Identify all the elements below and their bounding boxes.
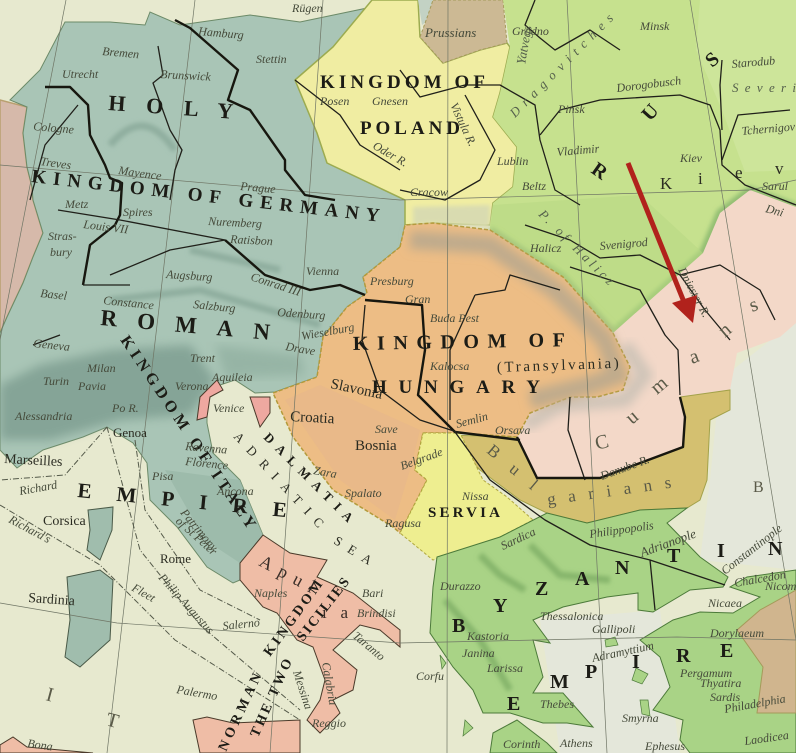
region: Sardinia	[65, 570, 113, 667]
labels: Byzantine Empire: Constantinople	[718, 521, 785, 577]
labels: Holy Roman Empire: Vienna	[306, 264, 339, 278]
region: Russia	[490, 0, 796, 333]
labels: Adriatic: SEA	[331, 533, 375, 568]
labels: Holy Roman Empire: Treves	[40, 154, 72, 172]
region: Poland southern band	[413, 205, 490, 228]
labels: Byzantine Empire: Corinth	[503, 737, 540, 751]
labels: Holy Roman Empire: Hamburg	[197, 24, 244, 42]
labels: Holy Roman Empire: Cologne	[33, 119, 75, 137]
labels: Russia: Minsk	[639, 19, 670, 33]
labels: Holy Roman Empire: EMPIRE	[77, 478, 288, 522]
labels: Holy Roman Empire: Corsica	[43, 514, 87, 529]
labels: Byzantine Empire: Adramyttium	[590, 638, 655, 665]
labels: Holy Roman Empire: Florence	[184, 454, 229, 473]
labels: Russia: Kiev	[679, 151, 703, 165]
labels: Holy Roman Empire: Fleet	[129, 580, 158, 605]
labels: Russia: Sarul	[762, 179, 789, 193]
region: Corsica	[87, 507, 113, 560]
region: North Africa	[0, 737, 93, 753]
region: Kingdom of the Two Sicilies mainland	[240, 535, 400, 733]
labels: Two Sicilies: Calabria	[319, 661, 340, 706]
labels: Holy Roman Empire: HOLY	[108, 90, 234, 124]
labels: Russia: Grodno	[512, 24, 549, 38]
labels: Holy Roman Empire: T	[104, 709, 121, 733]
labels: Holy Roman Empire: Wieselburg	[300, 320, 355, 343]
labels: Poland: Lublin	[496, 154, 528, 168]
labels: Holy Roman Empire: KINGDOM OF ITALY	[117, 333, 259, 532]
labels: Hungary: Belgrade	[398, 444, 445, 473]
labels: Russia: Pinsk	[557, 102, 585, 116]
labels: Two Sicilies: SICILIES	[294, 575, 353, 644]
labels: Hungary: HUNGARY	[372, 377, 540, 398]
labels: Holy Roman Empire: Geneva	[33, 336, 71, 354]
labels: Russia: U	[637, 100, 663, 125]
labels: Holy Roman Empire: Genoa	[113, 425, 147, 440]
labels: Holy Roman Empire: bury	[50, 245, 73, 259]
labels: Holy Roman Empire: Stettin	[256, 52, 287, 66]
region: Byzantine Europe	[430, 508, 728, 727]
labels: Adriatic	[231, 429, 375, 568]
labels: Holy Roman Empire: Drave	[283, 339, 317, 358]
labels: Byzantine Empire: Durazzo	[439, 579, 481, 593]
labels: Two Sicilies: Brindisi	[357, 606, 396, 620]
labels: Byzantine Empire: Janina	[462, 646, 495, 660]
labels: Holy Roman Empire: Conrad III	[249, 270, 303, 299]
labels: Holy Roman Empire	[4, 24, 381, 733]
labels: Cumans: C	[593, 430, 611, 455]
labels: Holy Roman Empire: Nuremberg	[207, 214, 262, 231]
region: Holy Roman Empire	[0, 7, 405, 583]
labels: Holy Roman Empire: Ravenna	[184, 439, 228, 457]
labels: Poland: Cracow	[410, 185, 448, 199]
labels: Hungary: Buda Pest	[430, 311, 480, 325]
labels: Serbia	[428, 489, 500, 521]
labels: Two Sicilies: KINGDOM	[261, 578, 326, 659]
region: Sicily	[193, 717, 300, 753]
labels: Holy Roman Empire: Richard's	[6, 512, 54, 546]
labels: Hungary: KINGDOM OF	[353, 329, 565, 355]
labels: Holy Roman Empire: Philip Augustus	[155, 570, 217, 637]
labels: Hungary: Ragusa	[384, 516, 421, 530]
region: Dalmatian coast	[250, 397, 270, 427]
labels: Byzantine Empire: Gallipoli	[592, 622, 635, 636]
region: Baltic water	[418, 0, 445, 25]
labels: Byzantine Empire	[416, 479, 796, 753]
region: France	[0, 100, 43, 333]
labels: Two Sicilies: THE TWO	[248, 657, 296, 740]
labels: Holy Roman Empire: ROMAN	[100, 305, 271, 345]
labels: Byzantine Empire: Kastoria	[466, 629, 509, 643]
labels: Two Sicilies	[27, 551, 396, 753]
labels: Hungary	[290, 274, 619, 530]
labels: Russia: Vladimir	[556, 141, 600, 159]
region: Serbia	[400, 433, 533, 560]
labels: Holy Roman Empire: Pavia	[77, 379, 106, 393]
labels: Holy Roman Empire: Po R.	[111, 401, 139, 415]
labels: Poland: Oder R.	[370, 138, 410, 170]
labels: Byzantine Empire: Laodicea	[742, 728, 790, 748]
labels: Byzantine Empire: Ephesus	[644, 739, 685, 753]
labels: Holy Roman Empire: Milan	[86, 361, 116, 375]
labels: Two Sicilies: NORMAN	[216, 671, 265, 753]
labels: Hungary: Save	[375, 422, 398, 436]
labels: Byzantine Empire: Philippopolis	[587, 518, 655, 541]
labels: Poland: Rügen	[291, 1, 323, 15]
region: Cumans	[517, 190, 796, 478]
labels: Holy Roman Empire: Louis VII	[82, 217, 130, 237]
labels: Cumans: n	[714, 319, 736, 342]
islands: Aegean	[440, 637, 650, 736]
region: Venice	[197, 380, 223, 420]
labels: Holy Roman Empire: Prague	[239, 179, 277, 196]
labels: Hungary: Spalato	[345, 486, 382, 500]
region: Byzantine Anatolia	[640, 570, 796, 753]
labels: Poland: KINGDOM OF	[320, 72, 485, 93]
labels: Russia: Yatvegs	[513, 24, 535, 66]
labels: Poland: Vistula R.	[447, 100, 480, 148]
labels: Poland: Posen	[319, 94, 349, 108]
labels: Bulgarians	[483, 441, 672, 509]
labels: Two Sicilies: Reggio	[311, 716, 346, 730]
labels: Serbia: SERVIA	[428, 505, 500, 521]
labels: Russia: Starodub	[731, 53, 776, 71]
labels: Cumans: a	[686, 345, 702, 369]
labels: Cumans: Danube R.	[597, 452, 651, 483]
labels: Russia: R	[587, 158, 612, 185]
labels: Byzantine Empire: BYZANTIN	[452, 538, 783, 637]
region: Byzantine Morea	[490, 720, 557, 753]
labels: Poland: Prussians	[424, 25, 476, 40]
labels: Cumans: s	[746, 293, 761, 317]
region: Seljuk lands	[737, 590, 796, 713]
labels: Hungary: Presburg	[369, 274, 414, 288]
labels: Russia: Dni	[763, 201, 785, 220]
region: Prussians	[420, 0, 507, 63]
labels: Holy Roman Empire: Marseilles	[4, 452, 63, 470]
labels: Holy Roman Empire: Spires	[123, 205, 153, 219]
labels: Byzantine Empire: Philadelphia	[722, 691, 787, 716]
labels: Russia: Tchernigov	[741, 119, 796, 138]
labels: Holy Roman Empire: Bremen	[102, 44, 140, 61]
arrow: red arrow pointing to Cuman lands	[628, 163, 697, 323]
labels: Holy Roman Empire: Mayence	[117, 163, 163, 183]
labels: Two Sicilies: Salerno	[222, 615, 260, 633]
labels: Russia: Svenigrod	[599, 235, 649, 253]
labels: Russia: v	[775, 159, 784, 178]
labels: Holy Roman Empire: Richard	[17, 477, 59, 498]
labels: Byzantine Empire: Thebes	[540, 697, 574, 711]
labels: Holy Roman Empire: of St Peter	[173, 514, 220, 558]
labels: Holy Roman Empire: Utrecht	[62, 67, 99, 81]
labels: Holy Roman Empire: Metz	[64, 197, 89, 211]
labels: Holy Roman Empire: Augsburg	[165, 267, 213, 284]
labels: Holy Roman Empire: Salzburg	[193, 297, 236, 315]
labels: Russia: Dniester R.	[675, 264, 713, 320]
labels: Holy Roman Empire: Ratisbon	[229, 232, 273, 248]
labels: Russia: Dorogobusch	[615, 73, 682, 95]
labels: Russia: K	[660, 174, 673, 193]
labels: Russia: S	[701, 48, 724, 72]
labels: Byzantine Empire: Thyatira	[700, 676, 741, 690]
labels: Holy Roman Empire: Brunswick	[160, 67, 212, 84]
labels: Poland: Gnesen	[372, 94, 408, 108]
labels: Byzantine Empire: Dorylaeum	[709, 626, 764, 640]
labels: Byzantine Empire: Nicaea	[707, 596, 742, 610]
labels: Holy Roman Empire: Aquileia	[211, 370, 253, 384]
labels: Bulgarians: garians	[546, 473, 672, 509]
labels: Byzantine Empire: Corfu	[416, 669, 444, 683]
labels: Cumans	[593, 293, 761, 483]
labels: Two Sicilies: Bari	[362, 586, 383, 600]
labels: Two Sicilies: Taranto	[350, 629, 388, 663]
labels: Byzantine Empire: Chalcedon	[733, 567, 787, 590]
labels: Byzantine Empire: Athens	[559, 736, 593, 750]
labels: Byzantine Empire: Larissa	[486, 661, 523, 675]
labels: Russia: P. of Halicz	[535, 206, 617, 288]
labels: Two Sicilies: Bona	[27, 736, 54, 753]
region: Poland	[295, 0, 517, 225]
labels: Byzantine Empire: Sardica	[498, 524, 538, 553]
labels: Two Sicilies: Messina	[290, 668, 316, 711]
labels: Cumans: u	[621, 406, 643, 429]
labels: Holy Roman Empire: Stras-	[48, 229, 77, 243]
labels: Serbia: Nissa	[461, 489, 489, 503]
labels: Hungary: Gran	[405, 292, 430, 306]
labels: Russia: Severi	[732, 80, 796, 95]
labels: Byzantine Empire: EMPIRE	[507, 640, 733, 715]
labels: Holy Roman Empire: KINGDOM OF GERMANY	[30, 166, 381, 227]
labels: Byzantine Empire: Smyrna	[622, 711, 659, 725]
labels: Two Sicilies: Palermo	[174, 682, 219, 703]
labels: Russia: i	[698, 169, 703, 188]
labels: Holy Roman Empire: Basel	[40, 286, 68, 303]
labels: Russia: e	[735, 163, 743, 182]
labels: Bulgarians: Bul	[483, 441, 542, 494]
labels: Byzantine Empire: Sardis	[710, 690, 741, 704]
labels: Holy Roman Empire: Sardinia	[28, 591, 76, 609]
labels: Holy Roman Empire: Turin	[43, 374, 69, 388]
labels: Holy Roman Empire: Constance	[103, 293, 155, 312]
labels: Hungary: Zara	[312, 463, 338, 481]
labels: Russia: Beltz	[522, 179, 546, 193]
region: Hungary and Croatia	[273, 223, 630, 533]
labels: Cumans: m	[646, 372, 672, 399]
labels: Adriatic: ADRIATIC	[231, 429, 327, 530]
labels: Holy Roman Empire: Rome	[160, 551, 191, 566]
labels: Holy Roman Empire: Pisa	[151, 469, 173, 483]
labels: Hungary: Kalocsa	[429, 359, 469, 373]
labels: Hungary: Croatia	[290, 409, 335, 427]
labels: Holy Roman Empire: I	[44, 684, 56, 707]
labels: Poland	[291, 1, 528, 199]
labels: Two Sicilies: Apul	[256, 551, 318, 597]
labels: Hungary: (Transylvania)	[497, 356, 619, 376]
labels: Russia	[506, 11, 796, 320]
labels: Byzantine Empire: Adrianople	[637, 526, 698, 560]
labels: Hungary: Orsava	[495, 423, 530, 437]
Aegean and Black Sea tint	[540, 320, 796, 753]
labels: Holy Roman Empire: Odenburg	[277, 305, 326, 322]
labels: Hungary: Bosnia	[355, 438, 397, 454]
labels: Byzantine Empire: B	[753, 479, 764, 496]
labels: Hungary: Slavonia	[329, 376, 384, 403]
labels: Adriatic: DALMATIA	[261, 430, 357, 525]
labels: Byzantine Empire: Pergamum	[679, 666, 733, 680]
labels: Holy Roman Empire: Alessandria	[14, 409, 72, 423]
labels: Russia: Halicz	[529, 241, 562, 255]
labels: Byzantine Empire: Thessalonica	[540, 609, 603, 623]
labels: Two Sicilies: Naples	[253, 586, 288, 600]
labels: Holy Roman Empire: Ancona	[216, 484, 254, 498]
labels: Holy Roman Empire: Venice	[213, 401, 245, 415]
labels: Poland: POLAND	[360, 118, 460, 139]
region: Bulgarians	[445, 390, 730, 523]
labels: Russia: Dragovitches	[506, 11, 616, 121]
Carpathian shading on Cumans side	[525, 345, 645, 425]
labels: Two Sicilies: ia	[322, 603, 348, 622]
labels: Holy Roman Empire: Trent	[190, 351, 216, 365]
labels: Holy Roman Empire: Patrimony	[177, 505, 221, 554]
labels: Hungary: Semlin	[454, 409, 489, 431]
labels: Holy Roman Empire: Verona	[175, 379, 209, 393]
